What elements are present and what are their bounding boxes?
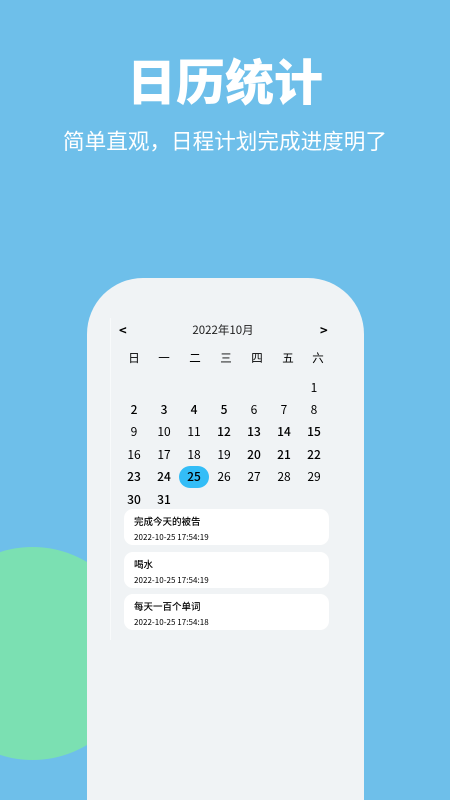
calendar	[119, 320, 328, 508]
date grid: 13	[247, 423, 261, 440]
task card 1	[124, 509, 329, 545]
weekday header: 二	[189, 350, 201, 366]
weekday header: 三	[220, 350, 232, 366]
previous month arrow: <	[119, 320, 127, 339]
date grid: 2	[131, 401, 137, 418]
date grid: 8	[311, 401, 317, 418]
weekday header: 四	[251, 350, 263, 366]
weekday header: 五	[282, 350, 294, 366]
date grid: 27	[247, 468, 261, 485]
date grid: 31	[157, 491, 171, 508]
date grid: 4	[191, 401, 197, 418]
date grid: 23	[127, 468, 141, 485]
decorative green circle	[0, 547, 139, 760]
date grid: 18	[187, 446, 201, 463]
weekday header: 一	[158, 350, 170, 366]
title: 日历统计	[127, 44, 323, 115]
date grid: 21	[277, 446, 291, 463]
date grid: 10	[157, 423, 171, 440]
next month arrow: >	[320, 320, 328, 339]
date grid: 12	[217, 423, 231, 440]
date grid: 14	[277, 423, 291, 440]
date grid: 26	[217, 468, 231, 485]
task card 1: 完成今天的被告	[134, 514, 201, 528]
task card 2: 喝水	[134, 557, 153, 571]
date grid: 28	[277, 468, 291, 485]
date grid: 9	[131, 423, 137, 440]
weekday header: 六	[312, 350, 324, 366]
date grid: 19	[217, 446, 231, 463]
task card 2: 2022-10-25 17:54:19	[134, 575, 209, 586]
date grid: 17	[157, 446, 171, 463]
date grid: 1	[311, 379, 317, 396]
date grid: 6	[251, 401, 257, 418]
date grid: 30	[127, 491, 141, 508]
inner left edge line	[110, 318, 111, 640]
date grid	[127, 379, 321, 508]
date grid: 16	[127, 446, 141, 463]
subtitle: 简单直观，日程计划完成进度明了	[63, 125, 387, 156]
date grid: 5	[221, 401, 227, 418]
weekday header	[128, 350, 324, 366]
date grid: 29	[307, 468, 321, 485]
date grid: 24	[157, 468, 171, 485]
weekday header: 日	[128, 350, 140, 366]
task card 3	[124, 594, 329, 630]
task card 3: 2022-10-25 17:54:18	[134, 617, 209, 628]
date grid: 3	[161, 401, 167, 418]
date grid: 7	[281, 401, 287, 418]
date grid: 22	[307, 446, 321, 463]
panel: phone card	[87, 278, 364, 800]
calendar month heading: 2022年10月	[192, 322, 254, 338]
date grid: 20	[247, 446, 261, 463]
date grid: 15	[307, 423, 321, 440]
task card 1: 2022-10-25 17:54:19	[134, 532, 209, 543]
task card 2	[124, 552, 329, 588]
date grid: 11	[187, 423, 201, 440]
task card 3: 每天一百个单词	[134, 599, 201, 613]
selected date highlight	[179, 466, 209, 488]
date grid: 25	[187, 468, 201, 485]
